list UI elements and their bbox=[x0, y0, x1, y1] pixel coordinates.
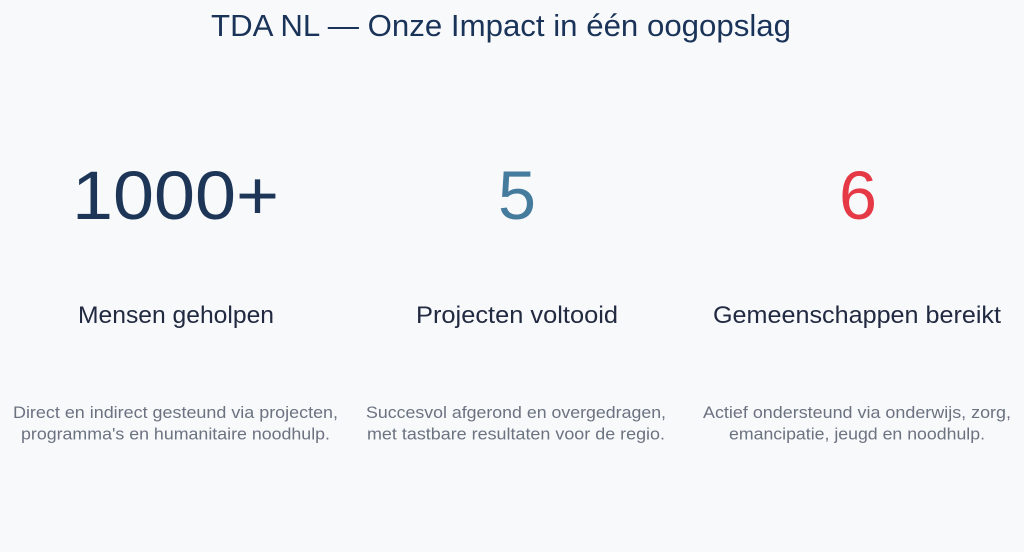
stat label: mensen geholpen: Mensen geholpen bbox=[78, 302, 274, 329]
description: gemeenschappen bereikt: emancipatie, jeugd en noodhulp. bbox=[729, 424, 985, 444]
description: gemeenschappen bereikt: Actief ondersteund via onderwijs, zorg, bbox=[703, 403, 1011, 422]
description: mensen geholpen: Direct en indirect gesteund via projecten, bbox=[13, 403, 338, 422]
panel: mensen geholpen bbox=[13, 157, 338, 444]
description: projecten voltooid: met tastbare resultaten voor de regio. bbox=[367, 424, 665, 444]
description: gemeenschappen bereikt bbox=[703, 403, 1011, 444]
panel: gemeenschappen bereikt bbox=[703, 157, 1011, 444]
description: mensen geholpen bbox=[13, 403, 338, 444]
description: projecten voltooid: Succesvol afgerond en overgedragen, bbox=[366, 403, 666, 422]
stat label: gemeenschappen bereikt: Gemeenschappen bereikt bbox=[713, 302, 1001, 329]
stat number: 5: 5 bbox=[498, 157, 536, 234]
stat number: 6: 6 bbox=[839, 157, 877, 234]
description: projecten voltooid bbox=[366, 403, 666, 444]
stat label: projecten voltooid: Projecten voltooid bbox=[416, 302, 618, 329]
title: TDA NL — Onze Impact in één oogopslag bbox=[211, 8, 791, 43]
description: mensen geholpen: programma's en humanitaire noodhulp. bbox=[21, 424, 330, 444]
stat number: 1000+: 1000+ bbox=[72, 157, 279, 234]
panel: projecten voltooid bbox=[366, 157, 666, 444]
